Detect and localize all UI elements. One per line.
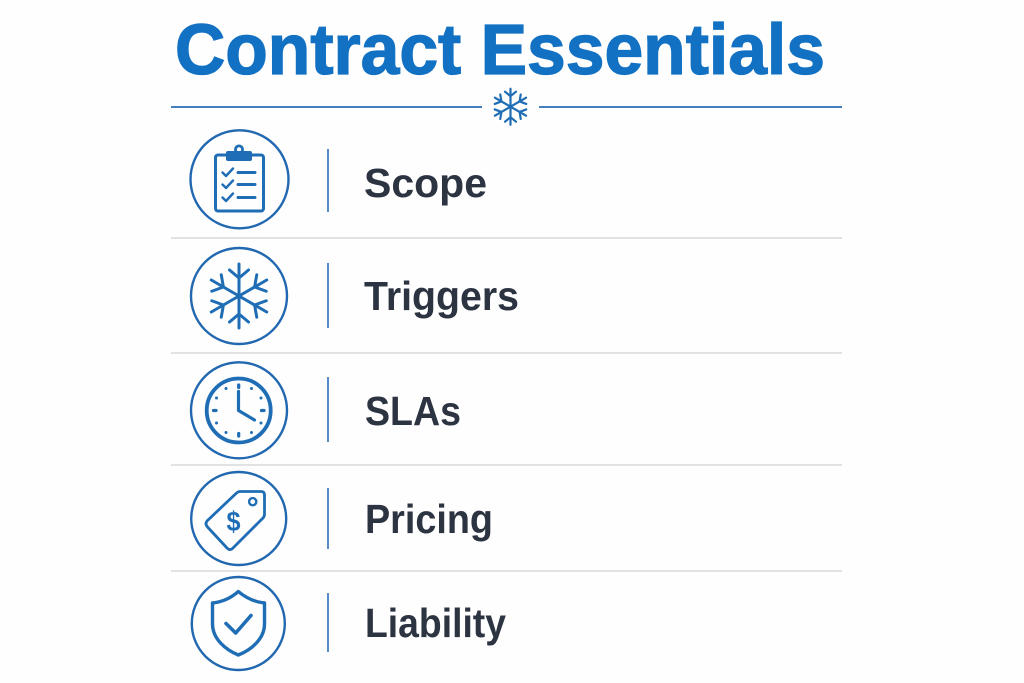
icon: shield with check <box>192 577 285 670</box>
label: Liability: Liability <box>365 600 506 646</box>
label: Pricing: Pricing <box>365 496 493 542</box>
title divider with snowflake <box>171 89 842 125</box>
icon: price tag: $ <box>226 506 241 537</box>
row: Pricing <box>191 472 493 565</box>
label: Scope: Scope <box>364 160 487 206</box>
row: SLAs <box>191 362 461 458</box>
icon: price tag <box>191 472 286 565</box>
icon: clock <box>191 362 287 458</box>
icon: small snowflake <box>492 89 529 125</box>
title: Contract Essentials <box>175 11 825 90</box>
icon: snowflake <box>191 248 287 344</box>
label: SLAs: SLAs <box>365 388 461 434</box>
row: Liability <box>192 577 506 670</box>
icon: clipboard checklist <box>190 130 288 228</box>
row: Triggers <box>191 248 519 344</box>
row: Scope <box>190 130 487 228</box>
label: Triggers: Triggers <box>364 273 519 319</box>
